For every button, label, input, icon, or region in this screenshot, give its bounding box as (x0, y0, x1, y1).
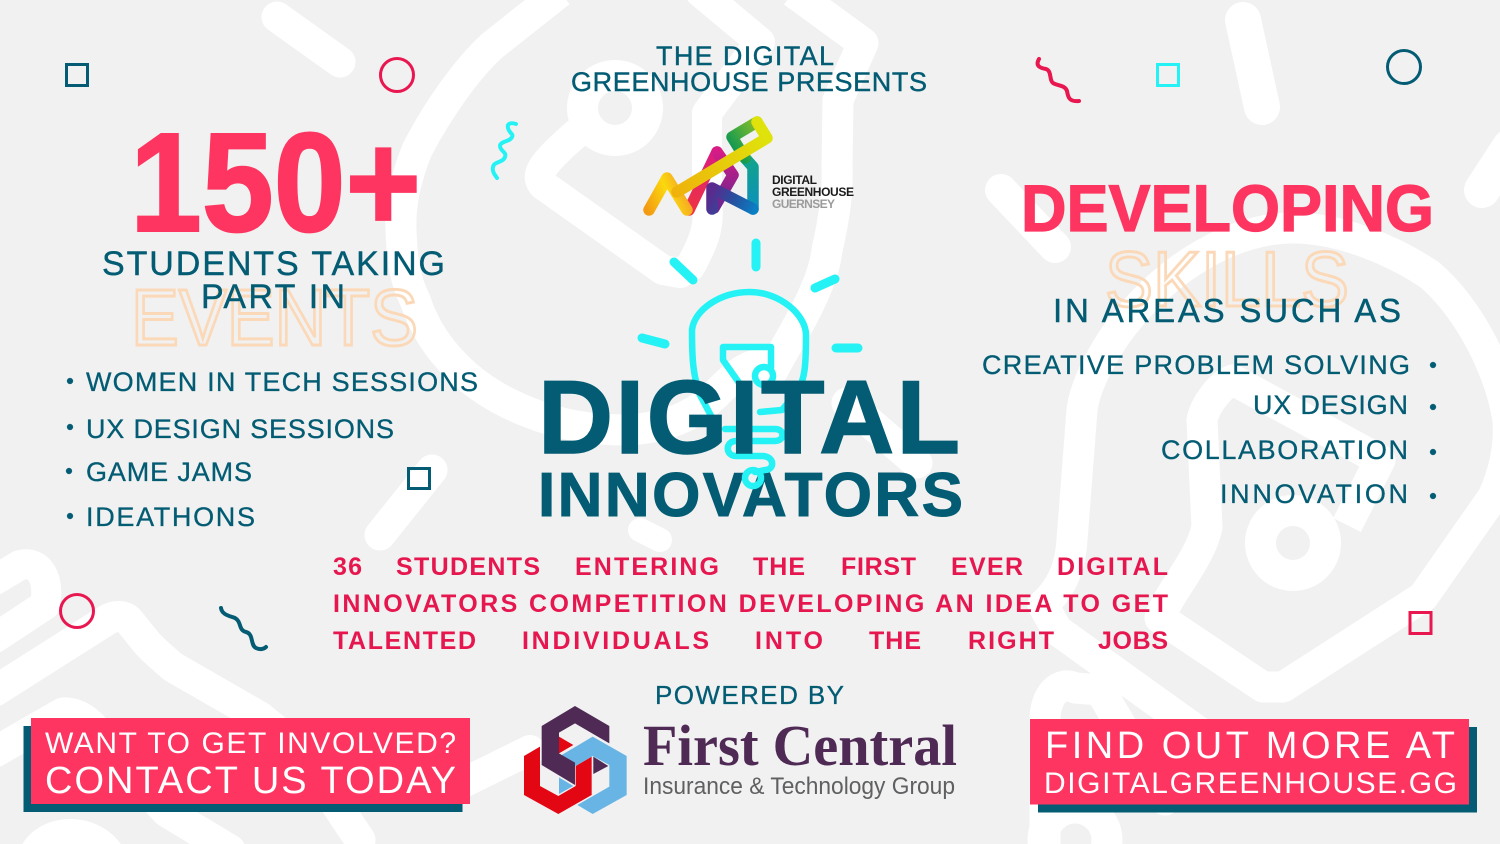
logo: First Central (524, 706, 957, 814)
shape: cyan squiggle (493, 123, 516, 178)
callout: find out more: FIND OUT MORE AT (1045, 725, 1455, 767)
stat caption: PART IN (201, 278, 345, 316)
outlined word events: EVENTS (131, 273, 418, 362)
logo wordmark (772, 173, 854, 211)
text block: competition description: RIGHT (968, 627, 1054, 655)
text block: competition description: 36 (333, 553, 362, 581)
list: skills (982, 350, 1436, 509)
callout: contact us: WANT TO GET INVOLVED? (45, 727, 456, 760)
text block: competition description: JOBS (1098, 627, 1168, 655)
stat caption: STUDENTS TAKING (102, 245, 445, 283)
wordmark: First Central (643, 713, 957, 778)
text block: competition description: DIGITAL (1057, 553, 1168, 581)
text block: competition description: EVER (951, 553, 1023, 581)
text block: competition description (333, 553, 1168, 655)
logo mark: hexagons (524, 706, 627, 814)
list: events: IDEATHONS (86, 502, 255, 532)
bulb outline (692, 292, 806, 427)
text: powered by: POWERED BY (655, 680, 844, 710)
list: skills: INNOVATION (1220, 479, 1408, 509)
text block: competition description: THE (753, 553, 805, 581)
stat caption (102, 245, 445, 316)
shape: cyan square (1158, 64, 1178, 86)
list: events: WOMEN IN TECH SESSIONS (86, 367, 478, 397)
callout: contact us (24, 718, 470, 812)
text block: competition description: ENTERING (575, 553, 719, 581)
subheading: IN AREAS SUCH AS (1053, 292, 1401, 329)
text block: competition description: STUDENTS (396, 553, 540, 581)
shape: pink squiggle (1038, 59, 1079, 101)
logo wordmark: GREENHOUSE (772, 185, 854, 199)
text block: competition description: INTO (755, 627, 823, 655)
list: events: GAME JAMS (86, 457, 252, 487)
callout: contact us: CONTACT US TODAY (45, 760, 456, 802)
logo wordmark: DIGITAL (772, 173, 817, 187)
title: digital: DIGITAL (538, 360, 960, 476)
shape: teal circle (1388, 50, 1420, 84)
shape: teal square (66, 64, 88, 86)
list: events: UX DESIGN SESSIONS (86, 414, 394, 444)
shape: pink lower circle (60, 594, 94, 628)
heading developing: DEVELOPING (1021, 171, 1434, 245)
list: skills: CREATIVE PROBLEM SOLVING (982, 350, 1410, 380)
shape: pink circle (380, 58, 414, 92)
callout: find out more: DIGITALGREENHOUSE.GG (1044, 767, 1457, 800)
panel: students stat (102, 103, 445, 362)
shape: teal small square (408, 468, 430, 488)
bulb rays (642, 243, 858, 348)
panel: developing skills (1021, 171, 1434, 329)
text block: competition description: THE (869, 627, 921, 655)
icon: light bulb (642, 243, 858, 486)
tagline: Insurance & Technology Group (643, 773, 955, 800)
shape: teal squiggle (221, 608, 266, 649)
header text: THE DIGITAL (656, 41, 834, 71)
callout: find out more (1030, 719, 1477, 812)
header text (571, 41, 927, 97)
text block: competition description: INNOVATORS COMPETITION DEVELOPING AN IDEA TO GET (333, 590, 1168, 618)
list: skills: UX DESIGN (1253, 390, 1408, 420)
list: skills: COLLABORATION (1161, 435, 1408, 465)
text block: competition description: FIRST (841, 553, 916, 581)
header text: GREENHOUSE PRESENTS (571, 67, 927, 97)
stat 150+: 150+ (130, 103, 421, 261)
list: events (66, 367, 478, 532)
text block: competition description: TALENTED (333, 627, 476, 655)
filament (723, 347, 782, 486)
logo wordmark: GUERNSEY (772, 197, 835, 211)
logo mark (649, 122, 767, 210)
logo: Digital Greenhouse Guernsey (649, 122, 854, 211)
title: innovators: INNOVATORS (538, 461, 963, 530)
shape: pink square (1410, 612, 1431, 634)
outlined word skills: SKILLS (1105, 235, 1349, 323)
text block: competition description: INDIVIDUALS (522, 627, 709, 655)
